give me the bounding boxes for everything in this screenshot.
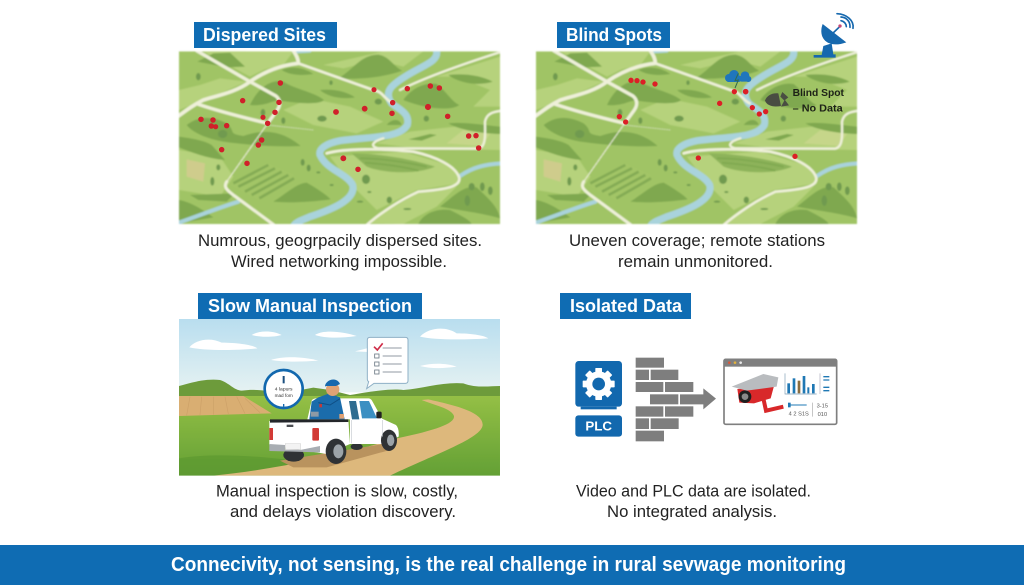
- data isolation diagram: [575, 358, 837, 441]
- takeaway banner: Connecivity, not sensing, is the real challenge in rural sevwage monitoring: [171, 553, 846, 576]
- brick wall: [636, 358, 693, 441]
- icon: clock with four hours: 4 lapurs: [275, 386, 293, 392]
- panel: blind spots: [534, 14, 860, 271]
- takeaway banner: [0, 545, 1024, 585]
- caption: manual inspection: and delays violation discovery.: [230, 503, 456, 521]
- heading: Blind Spots: Blind Spots: [566, 25, 662, 45]
- panel: isolated data: [560, 293, 837, 521]
- icon: storm clouds: [725, 70, 751, 88]
- caption: manual inspection: [216, 482, 458, 521]
- caption: isolated data: No integrated analysis.: [607, 503, 777, 521]
- heading: Blind Spots: [557, 22, 670, 48]
- heading: Isolated Data: Isolated Data: [570, 296, 683, 316]
- heading: Dispered Sites: Dispered Sites: [203, 25, 326, 45]
- caption: blind spots: remain unmonitored.: [618, 253, 773, 271]
- label: blind spot no data: Blind Spot: [793, 88, 845, 99]
- caption: blind spots: [569, 232, 825, 271]
- panel: slow manual inspection: [179, 293, 500, 521]
- map with sparse site markers: [534, 51, 860, 227]
- heading: Dispered Sites: [194, 22, 337, 48]
- readouts: 3-15: [817, 403, 828, 409]
- heading: Isolated Data: [560, 293, 691, 319]
- monitor dashboard: [724, 359, 837, 424]
- pickup truck with inspector: [269, 380, 399, 467]
- caption: manual inspection: Manual inspection is slow, costly,: [216, 482, 458, 500]
- icon: clock with four hours: mad fom: [275, 393, 293, 398]
- icon: no-data cloud: [765, 92, 789, 107]
- caption: dispersed sites: Wired networking impossible.: [231, 253, 447, 271]
- icon: security camera: [732, 374, 783, 411]
- illustration: truck on a rural road: [179, 319, 500, 476]
- caption: isolated data: Video and PLC data are isolated.: [576, 482, 811, 500]
- readouts: [788, 403, 828, 418]
- icon: PLC controller: PLC: [585, 419, 612, 434]
- map overlays in blind spots panel: [617, 14, 853, 160]
- label: blind spot no data: – No Data: [793, 103, 843, 114]
- caption: dispersed sites: Numrous, geogrpacily dispersed sites.: [198, 232, 482, 250]
- panel: dispersed sites: [177, 22, 503, 271]
- heading: Slow Manual Inspection: Slow Manual Inspection: [208, 296, 412, 316]
- caption: dispersed sites: [198, 232, 482, 271]
- icon: satellite dish: [814, 14, 853, 58]
- icon: PLC controller: [575, 361, 622, 437]
- caption: isolated data: [576, 482, 811, 521]
- arrow blocked by wall: [680, 388, 716, 409]
- readouts: 010: [818, 412, 827, 418]
- bar chart: [785, 373, 829, 394]
- sparse red markers: [617, 78, 797, 160]
- readouts: 4 2 S1S: [789, 411, 809, 417]
- icon: clock with four hours: [265, 370, 303, 408]
- inspector: [309, 380, 345, 419]
- icon: inspection checklist bubble: [367, 337, 408, 389]
- map with dense red site markers: [177, 51, 503, 227]
- scenery: [179, 319, 500, 476]
- caption: blind spots: Uneven coverage; remote stations: [569, 232, 825, 250]
- label: blind spot no data: [793, 88, 845, 114]
